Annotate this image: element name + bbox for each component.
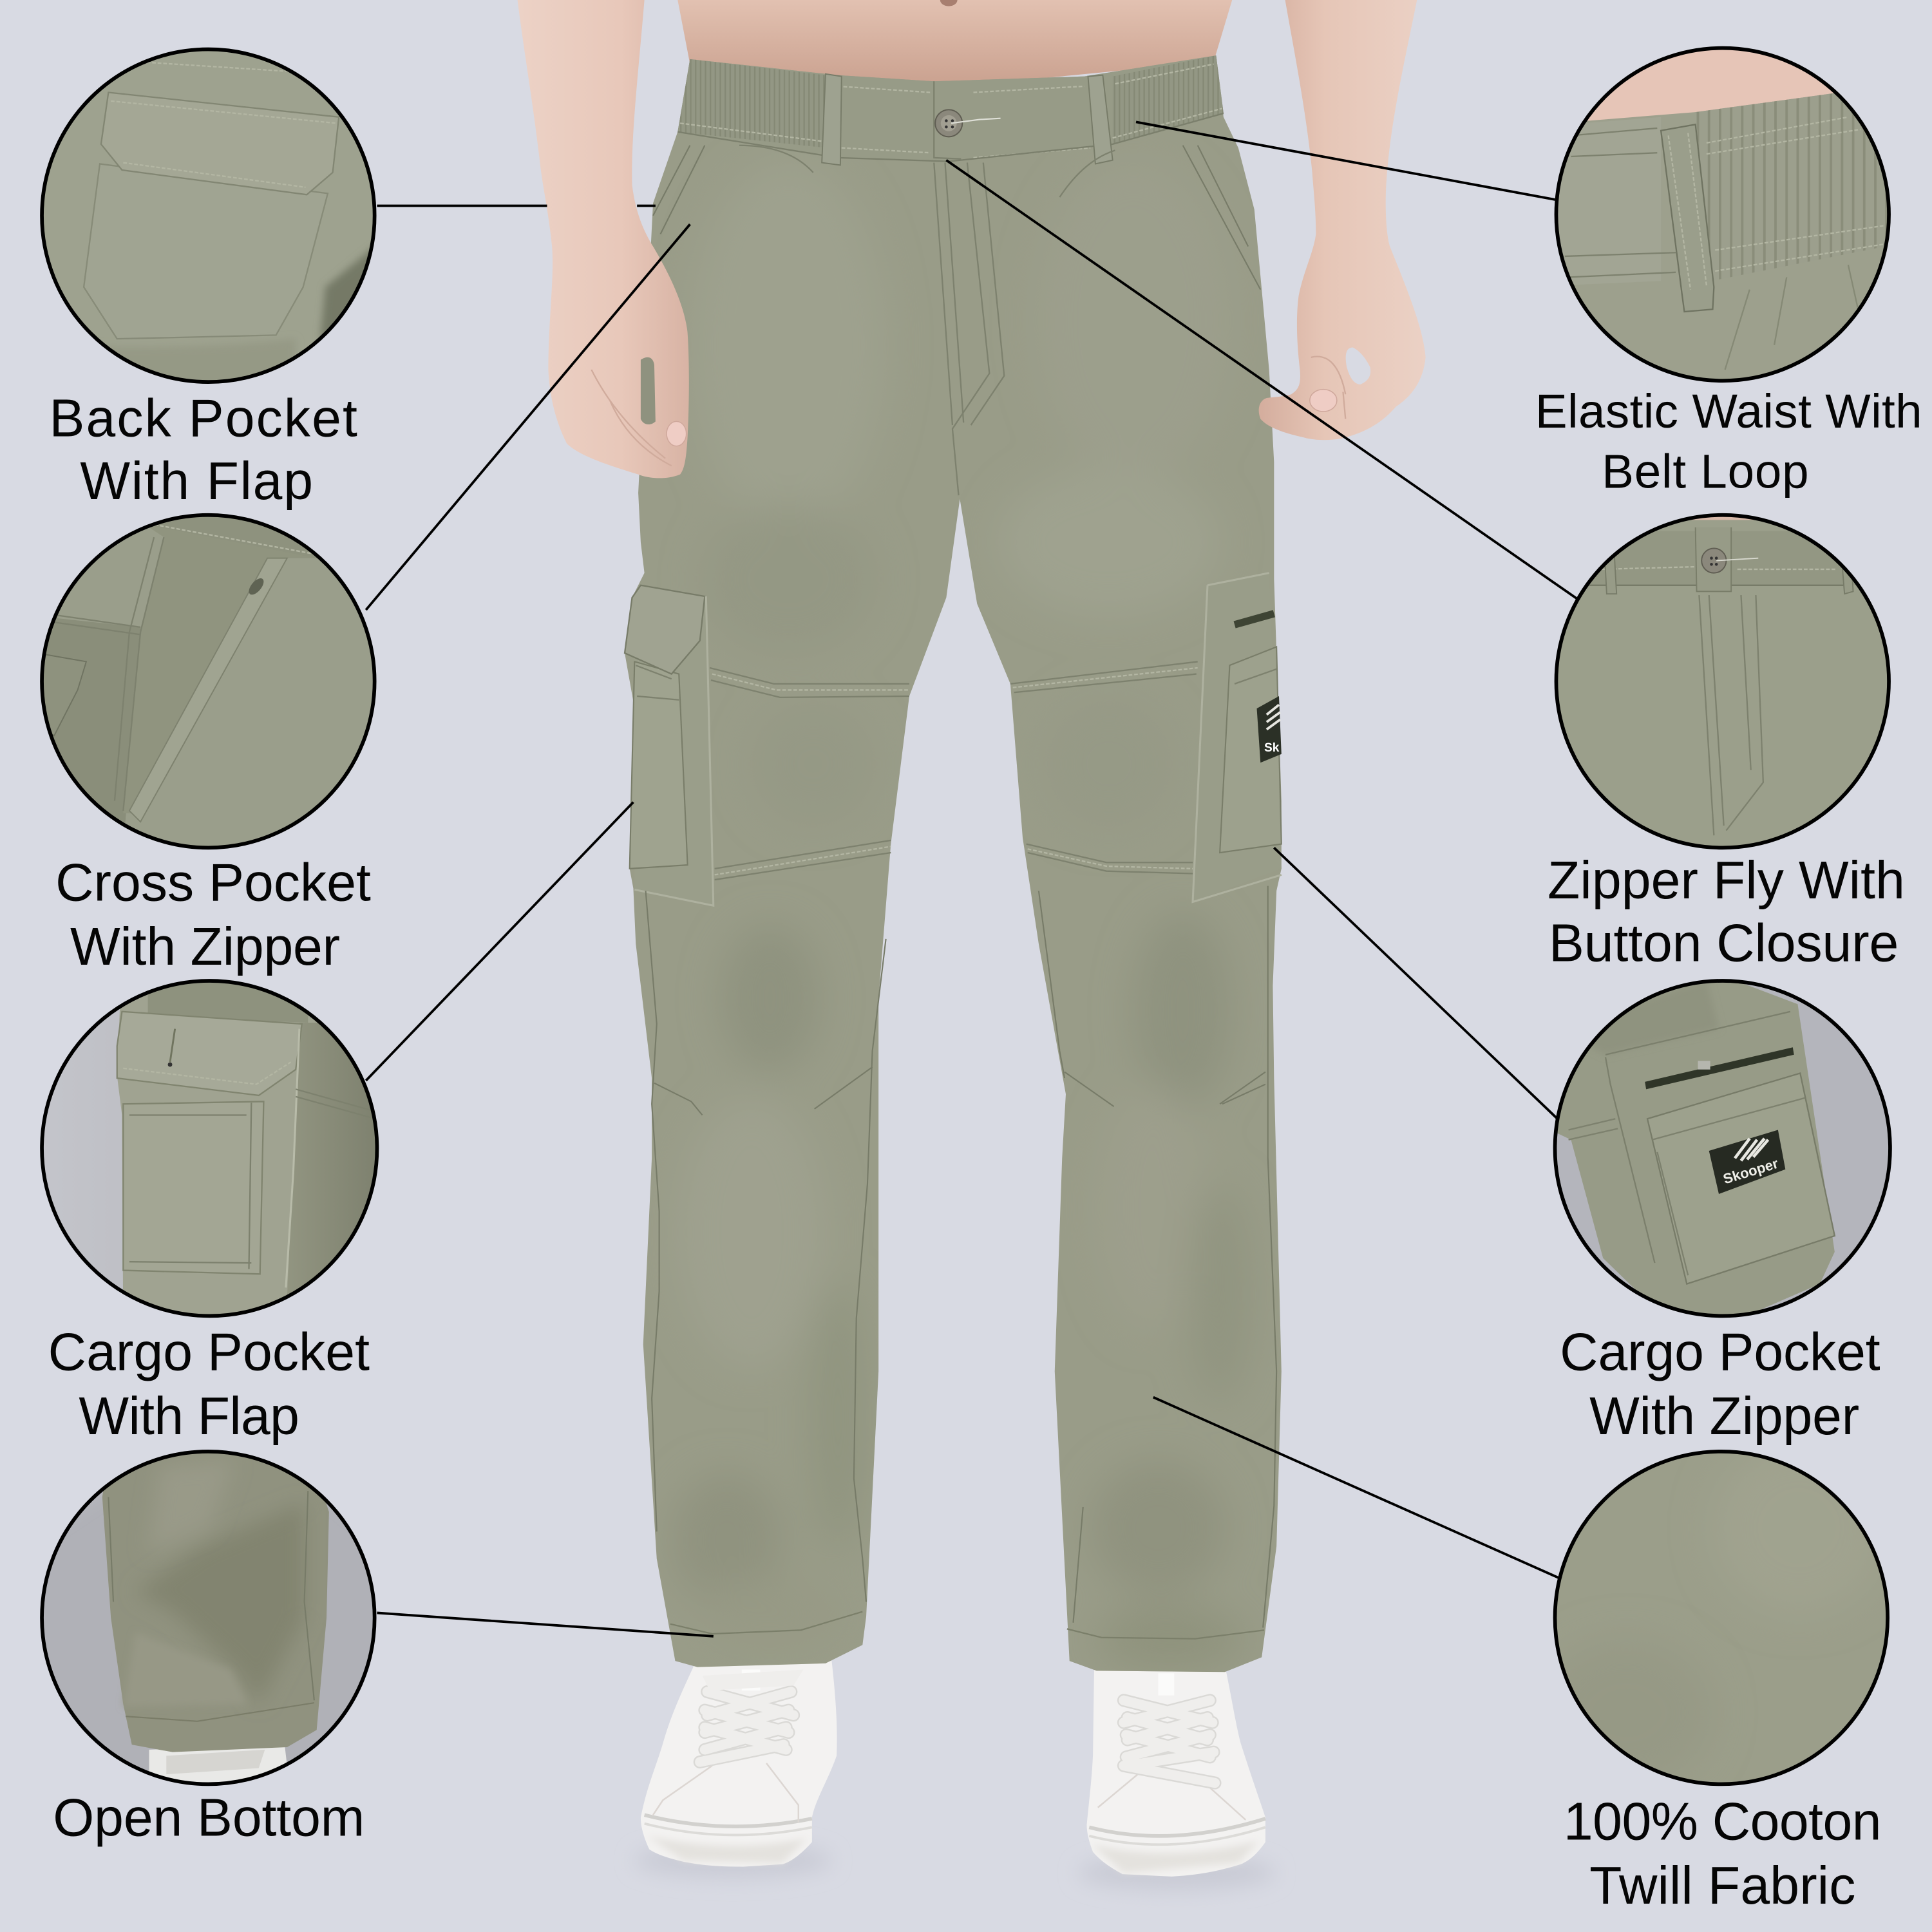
model figure	[518, 0, 1426, 1890]
label: cross pocket	[55, 854, 371, 976]
brand label: Skooper	[1721, 1155, 1781, 1187]
right cargo pocket	[1193, 573, 1282, 902]
lens ring	[1555, 981, 1890, 1316]
pants	[625, 55, 1282, 1672]
button	[935, 109, 1001, 137]
zipper	[1235, 614, 1274, 625]
right arm and hand	[1259, 0, 1426, 440]
lens ring	[42, 515, 375, 848]
brand label: Sk	[1264, 741, 1280, 755]
belt loops	[822, 74, 1113, 165]
line: twill fabric	[1153, 1397, 1560, 1578]
fabric shading	[694, 938, 1217, 1672]
side pockets	[653, 146, 1260, 290]
label: elastic waist: Belt Loop	[1602, 444, 1809, 498]
label: back pocket	[50, 389, 357, 511]
button	[1701, 548, 1758, 573]
lens ring	[42, 50, 375, 382]
label: cargo pocket with flap	[48, 1323, 370, 1446]
lens ring	[42, 981, 377, 1316]
brand label	[1257, 696, 1282, 762]
label: cross pocket: With Zipper	[70, 918, 340, 976]
left cargo pocket	[625, 585, 714, 905]
label: fabric: 100% Cooton	[1564, 1793, 1882, 1852]
leader lines	[366, 122, 1577, 1636]
line: cargo pocket with flap	[366, 802, 633, 1081]
lens ring	[1556, 515, 1889, 848]
line: elastic waist	[1136, 122, 1555, 200]
shoe shadows	[634, 1843, 1275, 1890]
label: cross pocket: Cross Pocket	[55, 854, 371, 913]
line: cargo pocket with zipper	[1274, 848, 1557, 1119]
detail: twill fabric	[1540, 1442, 1897, 1793]
zipper	[1645, 1047, 1794, 1089]
label: open bottom: Open Bottom	[53, 1789, 365, 1848]
label: cargo pocket with zipper: Cargo Pocket	[1560, 1323, 1880, 1382]
fly placket	[934, 163, 1004, 495]
waistband	[677, 55, 1224, 162]
label: zipper fly	[1548, 851, 1905, 972]
label: cargo pocket with zipper: With Zipper	[1589, 1387, 1859, 1446]
detail: cargo pocket with zipper	[1546, 973, 1897, 1325]
detail: zipper fly with button closure	[1553, 510, 1897, 855]
label: cargo pocket with flap: With Flap	[79, 1387, 299, 1446]
thumb nail	[667, 421, 687, 446]
label: zipper fly: Button Closure	[1549, 914, 1899, 972]
brand label	[1709, 1130, 1785, 1194]
torso skin	[677, 0, 1232, 89]
line: zipper fly	[946, 160, 1577, 599]
knee seams right	[1010, 661, 1198, 874]
label: cargo pocket with zipper	[1560, 1323, 1880, 1446]
label: back pocket: With Flap	[80, 452, 313, 511]
pants silhouette	[625, 55, 1282, 1672]
line: open bottom	[377, 1613, 714, 1636]
detail: cargo pocket with flap	[37, 973, 382, 1325]
label: fabric: Twill Fabric	[1589, 1857, 1855, 1915]
lower leg seams	[646, 886, 1276, 1627]
right shoe	[1087, 1669, 1265, 1877]
thumb nail	[1310, 390, 1337, 412]
lens ring	[1555, 1452, 1888, 1784]
left shoe	[641, 1661, 837, 1867]
detail: back pocket with flap	[37, 44, 382, 394]
line: cross pocket	[366, 224, 690, 610]
label: fabric	[1564, 1793, 1882, 1915]
label: elastic waist: Elastic Waist With	[1535, 384, 1922, 438]
label: back pocket: Back Pocket	[50, 389, 357, 448]
line: back pocket	[377, 205, 656, 207]
hem stitching	[670, 1612, 1264, 1639]
lens ring	[1556, 48, 1889, 381]
detail: open bottom	[37, 1448, 382, 1793]
lens ring	[42, 1452, 375, 1784]
detail: elastic waist with belt loop	[1553, 44, 1897, 394]
detail: cross pocket with zipper	[37, 510, 382, 855]
label: cargo pocket with flap: Cargo Pocket	[48, 1323, 370, 1382]
label: elastic waist	[1535, 384, 1922, 498]
left arm and hand	[518, 0, 689, 478]
label: zipper fly: Zipper Fly With	[1548, 851, 1905, 910]
knee seams left	[710, 668, 909, 880]
